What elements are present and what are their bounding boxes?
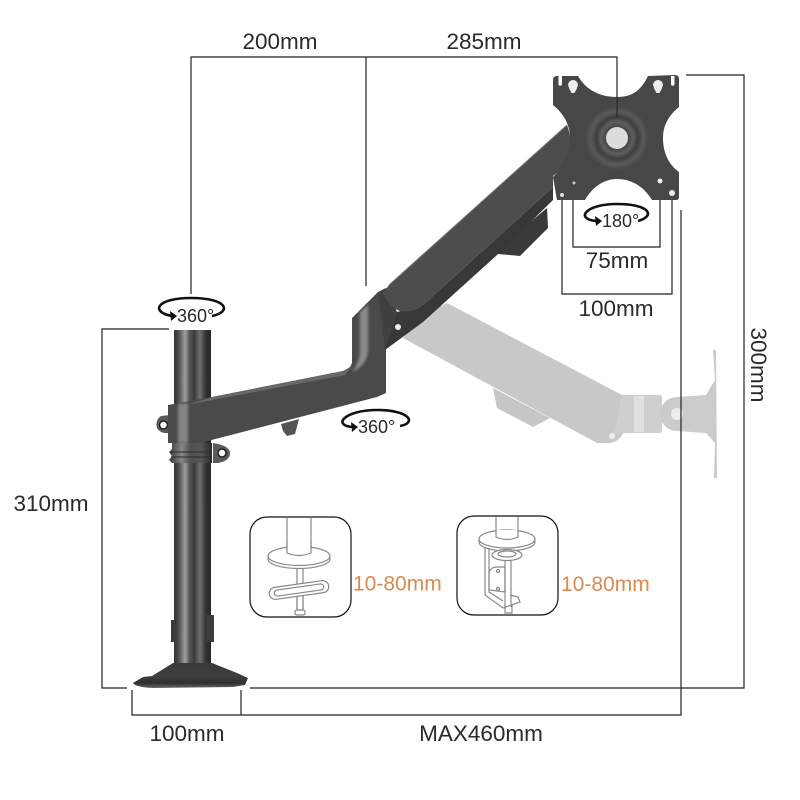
desk base — [133, 615, 248, 688]
upper arm top edge — [389, 125, 567, 285]
dimension labels: 100mm — [149, 721, 225, 746]
rotation icon: 360 elbow — [342, 410, 409, 437]
upper arm — [383, 125, 571, 311]
ghost arm: lowered position — [403, 303, 717, 478]
dimension labels: 300mm — [746, 327, 771, 403]
rotation icon: 360 pole — [159, 298, 224, 326]
arm elbow highlight — [178, 403, 188, 443]
dimension labels: 200mm — [242, 29, 318, 54]
arm top edge — [186, 366, 352, 405]
lower arm and riser — [168, 292, 386, 443]
clamp range labels — [353, 572, 650, 596]
dimension labels: 310mm — [13, 491, 89, 516]
monitor arm: dark mount — [133, 75, 679, 688]
collar — [169, 443, 212, 463]
inset: grommet mount — [250, 517, 351, 617]
bracket under upper arm — [497, 208, 548, 256]
pole — [174, 330, 211, 665]
knob left — [156, 415, 170, 433]
latch — [281, 419, 299, 436]
dimension labels: MAX460mm — [419, 721, 543, 746]
pivot pin — [395, 324, 401, 330]
plate centre drop line — [616, 97, 618, 117]
clamp range labels: 10-80mm — [561, 573, 650, 596]
rotation icon: 180 plate: 180° — [602, 211, 639, 231]
dimension labels: 285mm — [446, 29, 522, 54]
rotation icon: 180 plate — [585, 204, 648, 231]
screw holes — [658, 178, 662, 184]
upper arm underside — [384, 187, 553, 350]
disc — [585, 106, 649, 170]
inset: C clamp — [457, 516, 558, 615]
dimension lines — [102, 57, 744, 715]
riser highlight — [352, 305, 368, 372]
dimension labels: 75mm — [586, 248, 648, 273]
rotation icon: 360 pole: 360° — [177, 306, 214, 326]
dimension labels: 100mm — [578, 296, 654, 321]
knob right — [213, 443, 230, 463]
riser lobe — [378, 288, 397, 350]
VESA plate — [553, 75, 679, 200]
slots — [558, 76, 562, 86]
rotation icon: 360 elbow: 360° — [358, 417, 395, 437]
keyholes — [568, 80, 578, 93]
clamp range labels: 10-80mm — [353, 572, 442, 596]
pole clips — [171, 620, 176, 642]
